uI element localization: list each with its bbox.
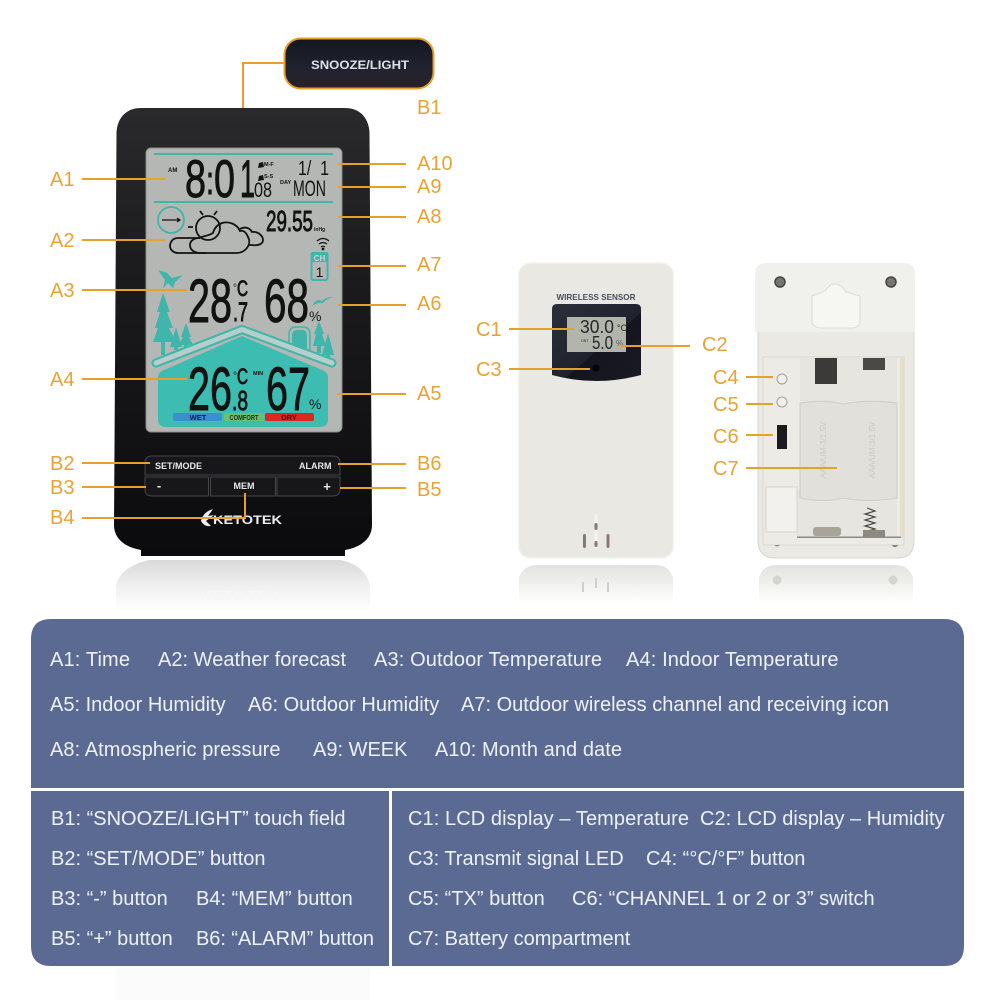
callout labels: C4 [713,367,739,389]
callout labels: A6 [417,293,441,315]
time readout: 1 [240,150,255,209]
callout labels: A7 [417,254,441,276]
time readout: M-F [264,162,274,168]
outdoor temperature: C [237,276,248,301]
comfort level bar: COMFORT [230,413,259,422]
callout labels: C3 [476,359,502,381]
callout labels: A3 [50,280,74,302]
atmospheric pressure: 29.55 [266,206,313,238]
trees and chimney [153,293,334,358]
main unit: display console [114,108,372,556]
legend panel: sensor items C [392,791,964,966]
battery compartment [797,358,901,538]
comfort level bar: DRY [281,413,297,422]
C5 button [777,397,787,407]
sensor LCD: ONT [581,339,589,343]
wall mount notch [812,284,860,328]
callout labels: A8 [417,206,441,228]
legend panel: display items A: A10: Month and date [435,739,622,761]
outdoor temperature: 28 [188,267,232,335]
control buttons: SET/MODE [155,461,202,471]
outdoor temperature: ° [233,283,237,294]
sensor LCD: % [616,339,623,348]
legend panel: display items A: A4: Indoor Temperature [626,649,838,671]
callout labels: A2 [50,230,74,252]
sensor rear body [758,330,914,558]
callout labels: B5 [417,479,441,501]
callout labels: B1 [417,97,441,119]
time readout: AM [168,168,177,174]
lower left block [766,487,797,532]
legend panel: display items A: A5: Indoor Humidity [50,694,226,716]
wireless sensor front [518,263,674,558]
LCD screen [146,148,342,432]
callout labels: C5 [713,394,739,416]
forecast trend arrow [158,207,184,233]
callout labels: B2 [50,453,74,475]
callout labels: A5 [417,383,441,405]
time readout: 0 [214,150,235,209]
interior frame [763,357,904,545]
legend panel: buttons B: B1: “SNOOZE/LIGHT” touch field [51,808,346,830]
indoor temperature: C [237,364,248,389]
legend panel: buttons B: B5: “+” button [51,928,173,950]
brand logo [201,509,282,527]
sensor reflection [519,565,673,603]
legend panel: buttons B [31,791,389,966]
callout labels: C1 [476,319,502,341]
legend panel: display items A: A8: Atmospheric pressure [50,739,280,761]
leader lines [82,63,837,518]
indoor temperature: ° [233,371,237,382]
comfort level bar [173,413,314,422]
battery compartment: AAA/UM-3/1.5V [819,421,828,478]
sensor LCD [567,317,628,353]
control buttons: MEM [234,481,254,491]
battery compartment: AAA/UM-3/1.5V [868,421,877,478]
right edge strip [900,358,904,538]
legend panel: display items A: A3: Outdoor Temperature [374,649,602,671]
callout labels: C2 [702,334,728,356]
weekday [280,176,326,201]
screws [772,277,899,546]
house roof [156,330,332,363]
channel switch [777,425,787,449]
callout labels: B6 [417,453,441,475]
channel indicator [312,253,328,280]
icon: outdoor bird [158,270,183,288]
comfort level bar: WET [190,413,207,422]
legend panel: display items A: A9: WEEK [313,739,408,761]
sensor LCD: 5.0 [592,333,613,353]
control buttons: - [157,478,161,493]
wireless sensor back [755,263,915,558]
legend panel: display items A [31,619,964,788]
callout labels: B4 [50,507,74,529]
outdoor humidity: % [309,308,321,324]
atmospheric pressure: inHg [314,227,325,233]
control buttons: + [323,479,331,494]
channel indicator: 1 [316,264,324,280]
sensor title: WIRELESS SENSOR [556,292,636,302]
weekday: DAY [280,180,291,186]
indoor temperature: .8 [232,385,248,416]
control buttons: ALARM [299,461,332,471]
legend panel: display items A: A6: Outdoor Humidity [248,694,439,716]
brand logo: KETOTEK [213,513,282,527]
legend panel: sensor items C: C1: LCD display – Temperature [408,808,689,830]
weather forecast icon [170,211,263,253]
legend panel: buttons B: B3: “-” button [51,888,168,910]
legend panel: sensor items C: C2: LCD display – Humidity [700,808,945,830]
legend panel: display items A: A1: Time [50,649,130,671]
callout labels: A1 [50,169,74,191]
legend panel: sensor items C: C7: Battery compartment [408,928,631,950]
sensor LCD: 30.0 [580,317,614,337]
back reflection [759,565,913,603]
icon: wireless signal [317,238,329,250]
legend panel: sensor items C: C3: Transmit signal LED [408,848,624,870]
callout labels: A4 [50,369,74,391]
faint bottom reflection [116,968,370,1000]
indoor temperature: 26 [188,355,232,423]
time readout: 08 [254,179,272,202]
C4 button [777,374,787,384]
callout labels: A10 [417,153,453,175]
indoor humidity: 67 [266,355,310,423]
sensor LCD: °C [617,323,628,333]
legend panel: sensor items C: C5: “TX” button [408,888,545,910]
callout labels: C6 [713,426,739,448]
indoor temperature: MIN [253,371,263,377]
sensor vents [583,514,610,549]
outdoor temperature: .7 [233,297,248,327]
outdoor humidity: 68 [264,267,309,335]
legend panel: display items A: A7: Outdoor wireless channel and receiving icon [461,694,889,716]
month and date: 1/ 1 [298,158,329,180]
rear hanging flap [755,263,915,332]
transmit LED [592,364,600,372]
main unit reflection [116,560,370,612]
legend panel: sensor items C: C6: “CHANNEL 1 or 2 or 3” switch [572,888,875,910]
indoor humidity: % [309,396,321,412]
snooze light touch field callout [284,38,434,88]
channel indicator: CH [314,254,325,263]
snooze light touch field callout: SNOOZE/LIGHT [311,58,410,72]
callout labels: A9 [417,176,441,198]
callout labels: B3 [50,477,74,499]
callout labels: C7 [713,458,739,480]
time readout [168,150,274,209]
time readout: 8 [185,150,206,209]
legend panel: sensor items C: C4: “°C/°F” button [646,848,805,870]
icon: flying bird [312,297,333,306]
main unit reflection: KETOTEK [200,588,281,603]
console body [114,108,372,556]
time readout: : [206,159,214,203]
control buttons [145,456,340,496]
house indoor area [158,336,328,427]
weekday: MON [293,176,326,201]
legend panel: buttons B: B4: “MEM” button [196,888,353,910]
legend panel: buttons B: B6: “ALARM” button [196,928,374,950]
time readout: S-S [264,174,274,180]
callout labels [50,97,739,529]
legend panel: buttons B: B2: “SET/MODE” button [51,848,266,870]
sensor display housing [552,304,641,381]
legend panel: display items A: A2: Weather forecast [158,649,346,671]
